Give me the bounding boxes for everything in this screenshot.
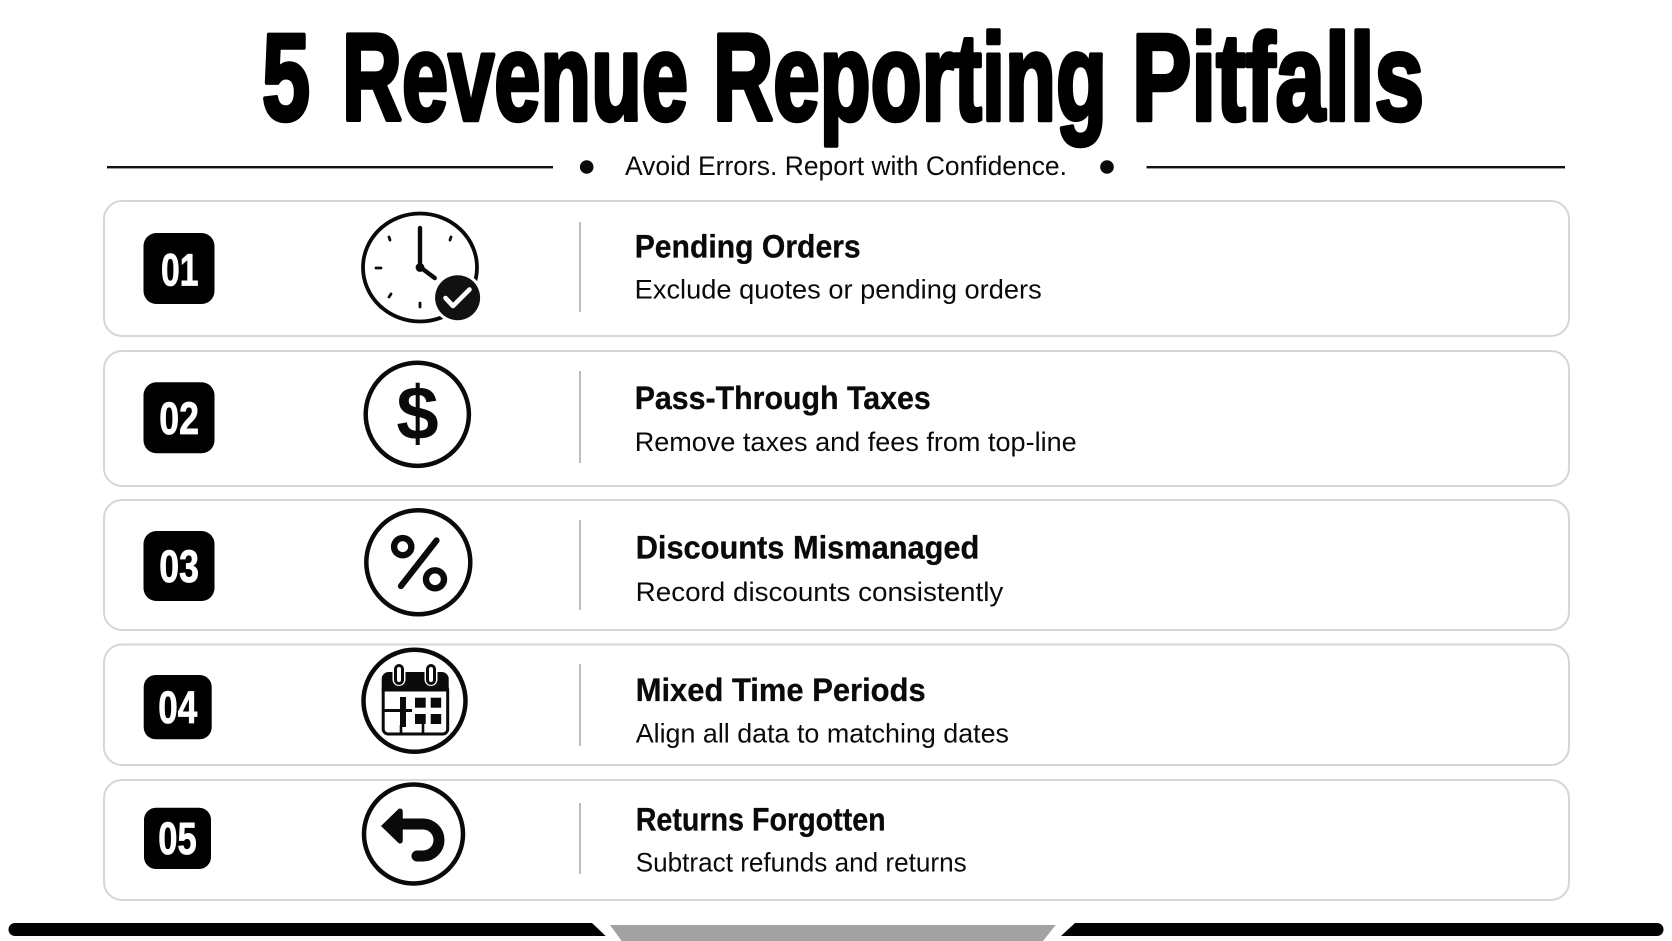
text: pending orders xyxy=(635,229,1042,304)
icon: percent xyxy=(366,510,470,614)
title: Reporting xyxy=(713,10,1107,147)
icon: dollar xyxy=(366,363,469,466)
number badge 02: 02 xyxy=(159,393,199,444)
text: pass-through taxes xyxy=(635,380,1077,457)
number badge 03: 03 xyxy=(159,541,199,592)
icon: return arrow xyxy=(364,784,463,884)
panel: pitfall 03 xyxy=(104,500,1569,630)
title: Revenue xyxy=(342,10,688,147)
panel: pitfall 04 xyxy=(104,644,1569,765)
number badge 04: 04 xyxy=(158,682,197,733)
text: discounts mismanaged xyxy=(636,529,1004,607)
number badge 05 xyxy=(144,808,211,869)
number badge 04 xyxy=(144,675,212,739)
text: discounts mismanaged: Discounts Mismanaged xyxy=(636,529,979,565)
text: pass-through taxes: Pass-Through Taxes xyxy=(635,380,931,416)
panel: pitfall 01 xyxy=(104,201,1569,336)
text: mixed time periods xyxy=(636,672,1009,749)
number badge 03 xyxy=(144,531,214,601)
subtitle with rules xyxy=(107,151,1565,181)
icon: clock with check xyxy=(363,214,483,323)
subtitle with rules: Avoid Errors. Report with Confidence. xyxy=(625,151,1067,181)
text: mixed time periods: Mixed Time Periods xyxy=(636,672,926,708)
text: returns forgotten xyxy=(636,802,967,878)
title xyxy=(262,10,1424,147)
title: Pitfalls xyxy=(1132,10,1424,147)
number badge 05: 05 xyxy=(158,813,197,864)
number badge 01 xyxy=(144,233,214,304)
text: pending orders: Exclude quotes or pending orders xyxy=(635,274,1042,304)
text: returns forgotten: Returns Forgotten xyxy=(636,802,886,838)
text: pending orders: Pending Orders xyxy=(635,229,861,265)
icon: dollar: $ xyxy=(396,372,439,456)
panel: pitfall 05 xyxy=(104,780,1569,900)
footer band xyxy=(8,923,1664,941)
panel: pitfall 02 xyxy=(104,351,1569,486)
icon: calendar xyxy=(364,650,466,752)
text: mixed time periods: Align all data to matching dates xyxy=(636,719,1009,749)
number badge 02 xyxy=(144,382,214,453)
title: 5 xyxy=(262,10,310,147)
text: pass-through taxes: Remove taxes and fees from top-line xyxy=(635,427,1077,457)
text: discounts mismanaged: Record discounts consistently xyxy=(636,577,1004,607)
text: returns forgotten: Subtract refunds and returns xyxy=(636,848,967,878)
number badge 01: 01 xyxy=(161,244,198,296)
